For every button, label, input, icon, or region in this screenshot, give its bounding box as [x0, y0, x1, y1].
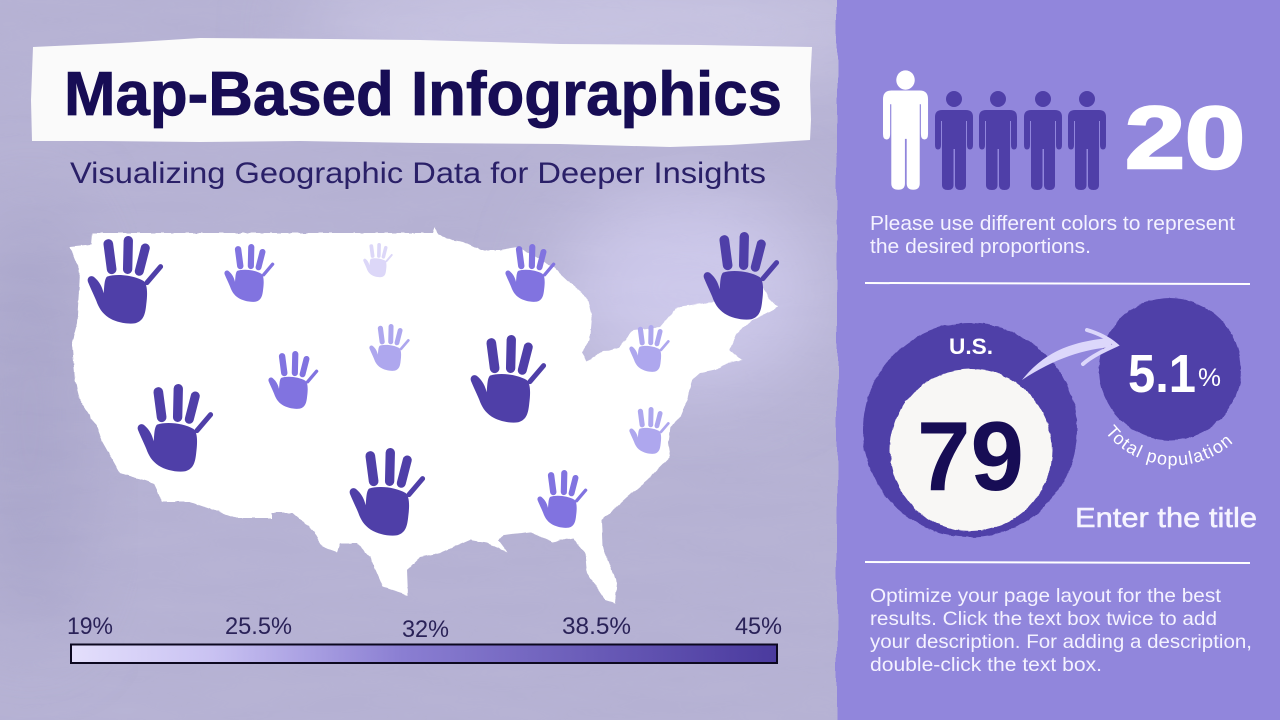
curved label: total population: Total population [1108, 424, 1232, 470]
text block: description [870, 585, 1252, 676]
text block: proportions note: Please use different colors to represent [870, 213, 1235, 235]
hand: nebraska light [369, 326, 408, 371]
scale bar [71, 644, 777, 663]
hand: north dakota pale [363, 245, 392, 277]
handprint markers [88, 237, 777, 536]
circle stat: U.S. 79 [863, 323, 1077, 537]
title banner: Map-Based Infographics [64, 60, 782, 129]
divider top [865, 283, 1250, 284]
number: 79: 79 [917, 401, 1024, 511]
text block: description: double-click the text box. [870, 654, 1102, 676]
hand: montana medium [224, 247, 273, 302]
scale labels: 38.5% [562, 613, 631, 640]
person icons: dark row [935, 91, 1106, 190]
hand: ohio light [629, 327, 668, 372]
inner light circle [890, 369, 1052, 531]
scale labels: 19% [67, 613, 113, 640]
subtitle: Visualizing Geographic Data for Deeper Insights [70, 157, 766, 190]
hand: northwest dark [88, 241, 161, 324]
outer dark circle [863, 323, 1077, 537]
circle stat: 5.1% [1099, 298, 1241, 440]
hand: midwest dark [471, 340, 544, 423]
arrow from U.S. to share [1022, 330, 1116, 380]
text block: proportions note: the desired proportions. [870, 236, 1091, 258]
hand: new england dark [704, 237, 777, 320]
text block: description: your description. For adding a description, [870, 631, 1252, 653]
statistic: 20: 20 [1125, 88, 1245, 187]
text block: description: results. Click the text box twice to add [870, 608, 1217, 630]
pictogram: one in five people [883, 70, 1106, 190]
person icon: highlighted white [883, 70, 928, 190]
gradient scale legend [67, 613, 782, 663]
right panel background [837, 0, 1280, 720]
scale labels: 45% [735, 613, 782, 640]
map of the United States [70, 227, 778, 603]
divider bottom [865, 562, 1250, 563]
heading: enter the title: Enter the title [1075, 502, 1257, 533]
hand: texas dark [350, 453, 423, 536]
text block: description: Optimize your page layout for the best [870, 585, 1222, 607]
textured lilac background [0, 0, 900, 720]
label: U.S.: U.S. [949, 334, 993, 359]
scale labels: 32% [402, 616, 449, 643]
scale labels: 25.5% [225, 613, 292, 640]
title banner [31, 38, 812, 147]
text block: proportions note [870, 213, 1235, 258]
small dark circle [1099, 298, 1241, 440]
number: 5.1: 5.1 [1128, 344, 1196, 404]
scale labels [67, 613, 782, 643]
hand: utah medium [268, 354, 317, 409]
hand: southwest dark [138, 389, 211, 472]
hand: virginia light [629, 409, 668, 454]
percent sign: % [1198, 364, 1221, 392]
hand: minnesota medium [505, 247, 554, 302]
hand: alabama medium [537, 473, 586, 528]
